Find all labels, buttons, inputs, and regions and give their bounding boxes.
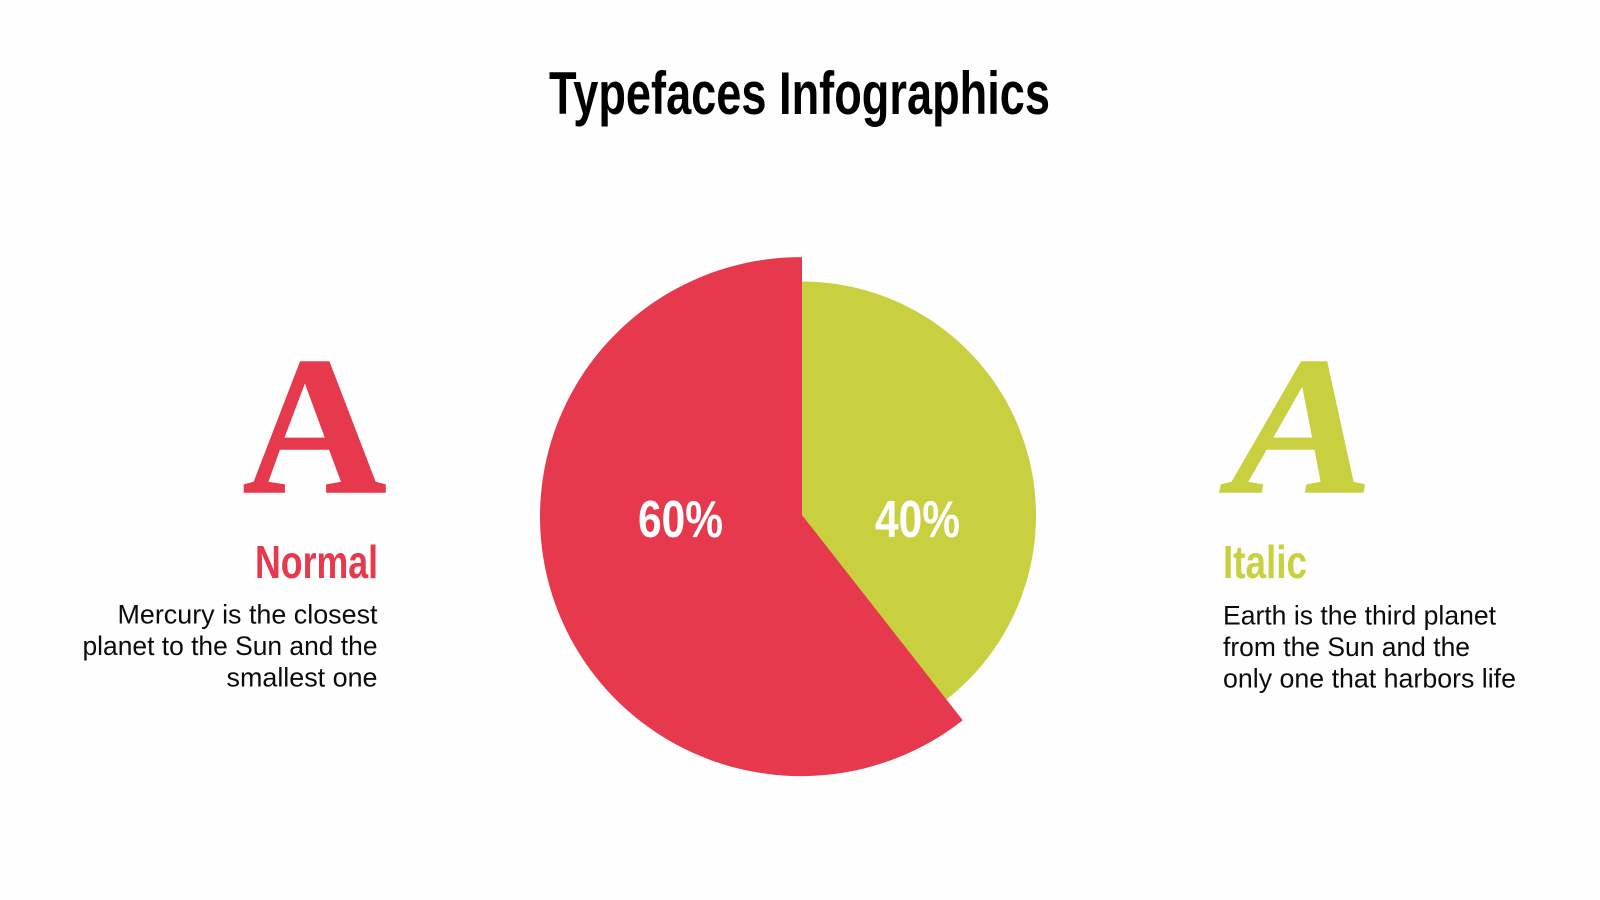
heading: normal: Normal (255, 536, 378, 588)
pie slice: 60% normal (540, 257, 963, 776)
text block: normal description: smallest one (226, 662, 378, 692)
title: Typefaces Infographics (549, 60, 1050, 127)
text block: normal description (82, 600, 378, 692)
text block: italic description: only one that harbors life (1223, 664, 1516, 694)
pie chart (540, 257, 1036, 776)
text block: normal description: planet to the Sun and the (82, 631, 378, 661)
icon: serif letter A italic: A (1219, 316, 1373, 535)
icon: serif letter A normal: A (242, 316, 386, 535)
heading: italic: Italic (1223, 536, 1307, 588)
pie slice: 40% italic (802, 282, 1036, 703)
panel: italic (1219, 316, 1516, 694)
pie label: 60%: 60% (638, 491, 723, 549)
pie label: 40%: 40% (875, 491, 960, 549)
text block: normal description: Mercury is the closest (118, 600, 378, 630)
text block: italic description (1223, 600, 1516, 694)
panel: normal (82, 316, 386, 692)
text block: italic description: Earth is the third planet (1223, 600, 1496, 630)
text block: italic description: from the Sun and the (1223, 632, 1470, 662)
